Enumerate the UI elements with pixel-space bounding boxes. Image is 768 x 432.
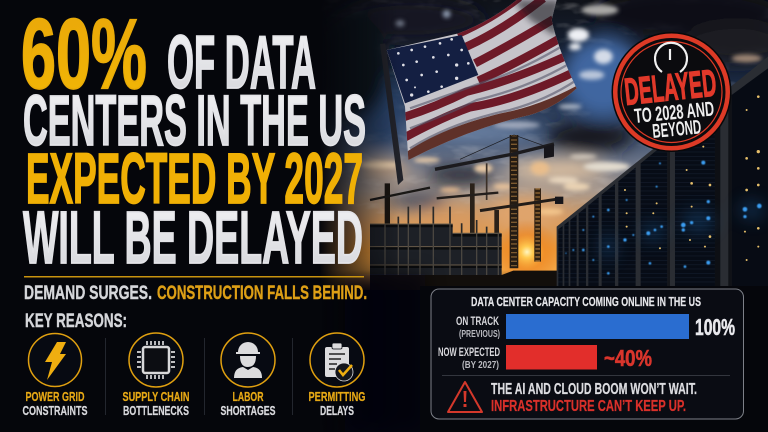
bar: now expected: (BY 2027) — [462, 360, 499, 371]
icon: worker — [221, 333, 275, 387]
sun — [495, 220, 559, 284]
title: WILL BE DELAYED — [23, 196, 363, 279]
key reasons heading: KEY REASONS: — [25, 311, 127, 332]
badge: delayed — [612, 32, 732, 152]
left dark fade — [0, 0, 400, 432]
bar: on track: (PREVIOUS) — [459, 329, 500, 340]
reason: permitting — [308, 333, 366, 418]
bar: on track — [456, 314, 735, 340]
reason: power grid — [22, 334, 88, 418]
icon: lightning bolt — [28, 334, 82, 386]
callout text — [491, 381, 697, 415]
reason: supply chain: SUPPLY CHAIN — [122, 390, 190, 404]
subheading: CONSTRUCTION FALLS BEHIND. — [157, 282, 367, 304]
reason: labor: LABOR — [232, 390, 264, 404]
bar: now expected: NOW EXPECTED — [438, 345, 500, 359]
callout text: INFRASTRUCTURE CAN’T KEEP UP. — [491, 398, 686, 415]
cranes and building under construction — [370, 135, 563, 290]
sky — [300, 0, 768, 290]
reason: labor — [220, 333, 276, 418]
building — [370, 224, 502, 277]
icon: microchip — [129, 333, 183, 387]
server racks — [557, 57, 768, 290]
bar: now expected: ~40% — [604, 345, 652, 371]
bar: now expected — [438, 345, 652, 371]
badge: delayed: BEYOND — [651, 116, 702, 143]
icon: clipboard with check — [310, 333, 364, 387]
title: 60% — [21, 0, 147, 109]
panel: capacity chart — [431, 289, 744, 419]
scene: sky, flag, cranes, servers — [138, 0, 768, 388]
title: EXPECTED BY 2027 — [26, 140, 363, 219]
main crane — [435, 135, 554, 268]
bar: on track: 100% — [695, 314, 735, 340]
icon: gauge — [655, 43, 687, 72]
ground — [370, 271, 558, 290]
title — [21, 0, 366, 279]
icon: American flag — [380, 0, 587, 185]
reason: permitting: PERMITTING — [308, 390, 366, 404]
subheading — [24, 282, 367, 304]
reason: supply chain — [122, 333, 190, 418]
reason: power grid: CONSTRAINTS — [22, 404, 88, 418]
gold divider — [24, 276, 364, 278]
subheading: DEMAND SURGES. — [24, 282, 152, 304]
reason: power grid: POWER GRID — [26, 390, 84, 404]
icon: warning triangle — [448, 382, 482, 412]
bar: on track: ON TRACK — [456, 314, 499, 328]
title: OF DATA — [167, 20, 316, 104]
reason: permitting: DELAYS — [320, 404, 354, 418]
badge: delayed: TO 2028 AND — [633, 97, 715, 128]
reason: labor: SHORTAGES — [220, 404, 276, 418]
reason: supply chain: BOTTLENECKS — [123, 404, 189, 418]
text: CENTERS IN THE US — [23, 82, 366, 161]
